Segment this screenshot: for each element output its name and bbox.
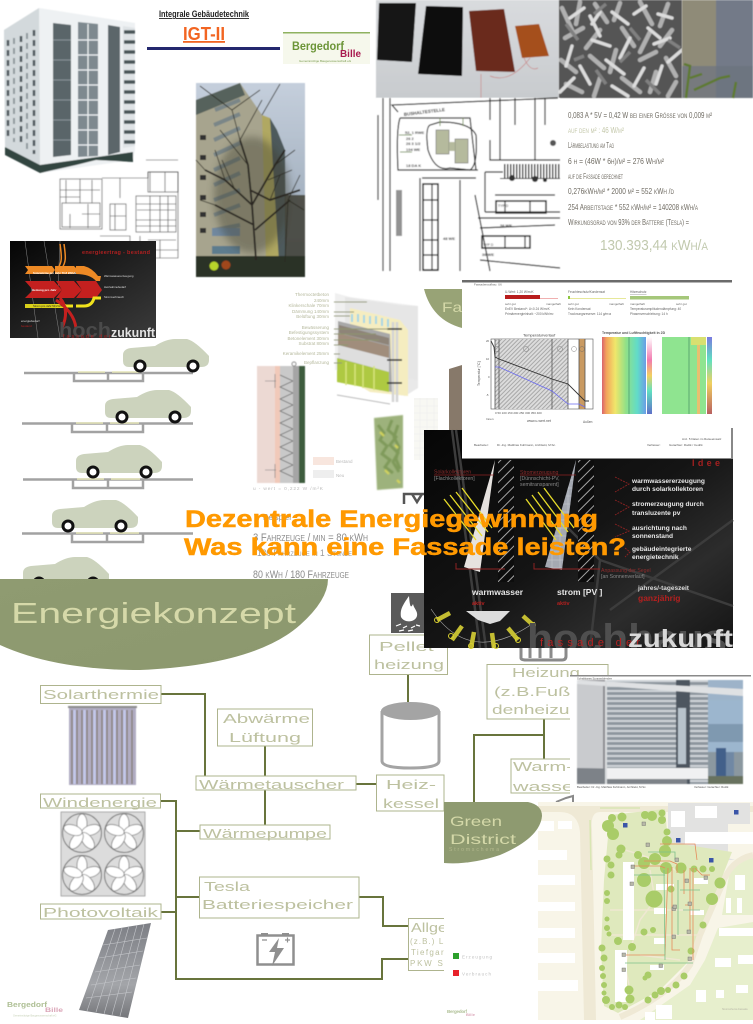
sail: PV	[545, 460, 576, 570]
chart: energieertrag bestand: Heizung pro Jahr	[32, 288, 57, 292]
traffic calculation text: 80 kWh / 180 Fahrzeuge	[253, 569, 349, 581]
idea list: energietechnik	[632, 554, 679, 561]
logo: hochhaus fassade der zukunft: hochhaus	[527, 617, 727, 661]
facade layer labels: Substrat 80mm	[298, 341, 329, 346]
site plan drawing: 48 WE	[443, 236, 455, 241]
panel: u-wert calculation sheet	[462, 280, 733, 459]
label: jahres tageszeit: jahres/-tageszeit	[637, 585, 690, 592]
chart: Temperaturverlauf: Temperatur [°C]	[477, 361, 481, 386]
facade layer labels: Bepflanzung	[304, 360, 329, 365]
rating: Feuchteschutz: Kein Kondensat	[568, 307, 591, 311]
rating: Hitzeschutz: sehr gut	[676, 302, 687, 306]
label: Stromerzeugung	[520, 470, 560, 488]
panel: u-wert calculation sheet: Fassadenaufbau: U6	[474, 282, 502, 286]
roads	[538, 806, 753, 1020]
box: Pelletheizung: Pellet-	[379, 639, 441, 654]
label: jahres tageszeit: ganzjährig	[638, 593, 681, 603]
sail: solar collector	[464, 460, 495, 572]
panel: Green District: District	[450, 831, 516, 847]
box: Abwärme Lüftung: Abwärme	[223, 711, 310, 726]
chart: Temperaturverlauf: 10	[486, 357, 490, 361]
radiator icon	[521, 648, 566, 660]
box: Wärmetauscher	[196, 776, 356, 792]
label: Solarkollektoren: [Flachkollektoren]	[434, 476, 475, 482]
box: Wärmepumpe	[200, 825, 330, 841]
3D facade section	[334, 293, 418, 404]
heading: energieertrag bestand: energieertrag - bestand	[82, 250, 150, 256]
cars on piezo road	[22, 339, 209, 590]
map credit: Stromschema Fassade	[722, 1008, 748, 1011]
site plan drawing	[376, 98, 560, 271]
chart: energieertrag bestand: Solarwärme pro Jahr 70.8 kWh/a	[33, 271, 77, 275]
box: Warmwasser: Warm-	[513, 759, 573, 774]
idea list: transluzente pv	[632, 510, 681, 517]
car 1	[123, 339, 209, 371]
sheet footer: Anz. 5 Daten im Reiseeinsatz	[682, 437, 722, 441]
chart: energieertrag bestand: Heizwärmebedarf	[104, 285, 126, 289]
chart: Temperaturverlauf: Temperaturverlauf	[523, 332, 556, 338]
box: Photovoltaik: Photovoltaik	[43, 905, 159, 920]
sheet footer: Dr.-Ing. Matthias Kuhlmann, Architekt, M.Sc.	[497, 443, 556, 447]
chart: Temperaturverlauf: Innen	[486, 417, 494, 421]
calculation text block: Lärmbelastung am Tag	[568, 141, 614, 150]
site plan drawing: TYP D	[498, 204, 509, 208]
olive panel fragment	[424, 289, 462, 328]
calculation text block: 254 Arbeitstage * 552 kWh/m² = 140208 kWh/a	[568, 203, 698, 212]
rating: U-Wert: EnEV Bestand*: U<0.24 W/m²K	[505, 307, 551, 311]
rule under heading	[147, 47, 280, 50]
panel: Green District	[444, 802, 542, 863]
site plan drawing: TYP D	[483, 243, 494, 247]
facade layer labels: 240mm	[314, 298, 329, 303]
heading panel: Energiekonzept: Energiekonzept	[11, 598, 296, 630]
box: Windenergie	[40, 794, 160, 810]
road section 1	[24, 372, 193, 381]
heading: IGT-II: IGT-II	[183, 24, 225, 44]
site map: green district	[538, 802, 753, 1020]
label: Anpassung der Segel	[601, 568, 651, 580]
idea list: ausrichtung nach	[632, 525, 687, 532]
chart: Temperaturverlauf: Außen	[583, 420, 593, 424]
chart: energieertrag bestand: Strom pro Jahr 59 kWh	[33, 304, 62, 308]
chart: energieertrag bestand: energiebedarf	[21, 319, 40, 323]
meter tags	[622, 822, 708, 972]
floor plan	[60, 160, 178, 258]
calculation text block: 6 h = (46W * 6h)/m² = 276 Wh/m²	[568, 157, 664, 166]
idea list: sonnenstand	[632, 533, 673, 540]
facade layer labels: Dämmung 140mm	[292, 309, 329, 314]
title: Dezentrale Energiegewinnung: Was kann eine Fassade leisten?	[184, 534, 626, 561]
box: Allgemein: (z.B.) Licht	[410, 937, 461, 946]
site plan drawing: 52, 1 RWE	[405, 130, 425, 135]
traffic calculation text: Beispiel	[263, 513, 291, 522]
logo: Bergedorf Bille small: Bille	[45, 1007, 63, 1014]
logo: hochhaus zukunft	[59, 320, 156, 342]
label: Solarkollektoren: Solarkollektoren	[434, 470, 471, 476]
heading: Idee: Idee	[692, 458, 720, 468]
chart: Temperaturverlauf: 20	[486, 339, 490, 343]
facade layer labels: Belüftung 30mm	[296, 314, 329, 319]
chart: temperature and humidity maps	[602, 331, 712, 414]
label: Anpassung der Segel: Anpassung der Segel	[601, 568, 651, 574]
rating: Hitzeschutz: Phasenverschiebung: 14 h	[630, 312, 668, 316]
label: Solarkollektoren	[434, 470, 475, 482]
label: warmwasser aktiv: warmwasser	[471, 587, 524, 597]
box: Allgemein: PKW Stell	[410, 959, 460, 968]
facade layer labels: Bewässerung	[302, 325, 329, 330]
flame icon	[391, 593, 427, 633]
trees	[598, 810, 726, 1010]
result value: 130.393,44 kWh/a	[600, 237, 709, 254]
photo: existing tower	[196, 83, 305, 277]
road section 3	[23, 479, 193, 488]
hatched facade columns	[498, 460, 514, 582]
buildings	[538, 806, 753, 1020]
logo: Bergedorf Bille: Bergedorf	[292, 41, 344, 53]
site plan drawing: 26 2	[406, 136, 415, 141]
box: Tesla Batteriespeicher: Tesla	[204, 879, 251, 894]
car 4	[52, 500, 138, 531]
calculation text block: auf den m² : 46 W/m²	[568, 126, 624, 135]
logo: hochhaus zukunft: fassade der	[63, 334, 111, 340]
chart: Temperaturverlauf: 0	[488, 375, 490, 379]
traffic calculation text	[253, 513, 368, 581]
box: Warmwasser	[511, 759, 601, 794]
label: strom PV aktiv: aktiv	[557, 601, 570, 607]
facade layer labels: Betonelement 30mm	[287, 336, 329, 341]
logo: Bergedorf Bille small	[7, 1000, 63, 1018]
label: jahres tageszeit	[637, 585, 690, 603]
box: Pelletheizung: heizung	[374, 657, 444, 672]
calculation text block: 0,083 A * 5V = 0,42 W bei einer Grösse von 0,009 m²	[568, 111, 712, 120]
box: Heizung: Heizung	[512, 665, 580, 680]
panel: Energiekonzept diagram	[7, 593, 608, 1018]
calculation text block	[568, 111, 712, 254]
facade layer labels: Thermoctetbeton	[295, 292, 329, 297]
box: Solarthermie: Solarthermie	[43, 687, 159, 702]
panel: window shading photo: Schaltbares Sonnenblenden	[577, 676, 613, 680]
photovoltaic panel	[79, 923, 151, 1018]
road section 4	[22, 533, 193, 542]
box: Photovoltaik	[40, 904, 161, 920]
label: Stromerzeugung: [Dünnschicht-PV,	[520, 476, 560, 482]
label: Stromerzeugung: Stromerzeugung	[520, 470, 558, 476]
box: Abwärme Lüftung: Lüftung	[229, 730, 301, 745]
site plan drawing: 18 DA K	[406, 163, 421, 168]
rating: U-Wert: U-Wert: 1,20 W/m²K	[505, 290, 535, 294]
rating: Feuchteschutz: Trocknungsreserve: 114 g/m²a	[568, 312, 611, 316]
box: Allgemein	[408, 918, 478, 970]
traffic calculation text: 180 Fahrzeuge in 1 Stunde	[257, 548, 352, 558]
box: Solarthermie	[40, 686, 161, 704]
rating: Hitzeschutz: Hitzeschutz	[630, 290, 647, 294]
calculation text block: auf die Fassade gerechnet	[568, 172, 623, 181]
box: Pelletheizung	[370, 635, 448, 674]
facade layer labels	[283, 292, 329, 365]
idea list: gebäudeintegrierte	[632, 546, 692, 553]
wall section	[257, 362, 305, 483]
solar rays	[444, 488, 574, 540]
panel: window shading photo	[570, 675, 753, 801]
sheet footer	[474, 437, 722, 447]
box: Heizkessel: kessel	[383, 796, 439, 811]
wall section legend	[253, 457, 353, 492]
parking icons	[623, 810, 738, 862]
label: Anpassung der Segel: [an Sonnenverlauf]	[601, 574, 645, 580]
calculation text block: 0,276kWh/m² * 2000 m² = 552 kWh /d	[568, 187, 675, 196]
logo: Bergedorf Bille small right: Bergedorf	[447, 1009, 468, 1014]
tile panel fragment	[414, 398, 438, 460]
sun path shuttles	[431, 609, 536, 648]
box: Tesla Batteriespeicher: Batteriespeicher	[202, 897, 354, 912]
green wall sample	[374, 415, 403, 490]
photo: stone tiles with plant	[682, 0, 753, 98]
box: Heizung	[487, 664, 608, 719]
panel: Green District: Green	[450, 813, 502, 829]
box: Warmwasser: wasser	[511, 779, 582, 794]
chart: energieertrag bestand: Warmwassererzeugung	[104, 274, 134, 278]
label: warmwasser aktiv	[471, 587, 524, 607]
box: Heizkessel	[376, 775, 444, 811]
chart: energieertrag bestand: Stromverbrauch	[104, 295, 124, 299]
box: Windenergie: Windenergie	[43, 795, 157, 810]
box: Abwärme Lüftung	[218, 709, 312, 746]
label: Stromerzeugung: semitransparent]	[520, 482, 559, 488]
site plan drawing: 104 WE	[406, 147, 421, 152]
rating: U-Wert	[505, 290, 561, 316]
title: Dezentrale Energiegewinnung: Dezentrale Energiegewinnung	[185, 506, 598, 533]
box: Allgemein: Tiefgarage	[411, 948, 462, 957]
icon: battery	[258, 933, 294, 966]
logo: Bergedorf Bille small: Gemeinnützige Baugenossenschaft eG	[13, 1014, 57, 1018]
site plan drawing: BUSHALTESTELLE	[404, 107, 445, 117]
car 2	[105, 390, 191, 422]
rating: U-Wert: mangelhaft	[546, 302, 561, 306]
heading panel: Energiekonzept	[0, 579, 328, 670]
energy network lines	[625, 844, 710, 963]
solar thermal collector	[68, 706, 137, 785]
site plan drawing: 36 WE	[500, 223, 512, 228]
photo: phones and solar foils	[376, 0, 559, 98]
logo: Bergedorf Bille small right: Bille	[466, 1012, 476, 1017]
facade layer labels: Keramikelement 25mm	[283, 351, 329, 356]
idea list: durch solarkollektoren	[632, 486, 703, 493]
panel: window shading photo: Bearbeiter: Dr.-Ing. Matthias Kuhlmann, Architekt, M.Sc.	[577, 785, 647, 789]
panel: hochhaus facade idea	[424, 430, 734, 661]
chart: energieertrag bestand: bestand	[21, 324, 32, 328]
rating: Feuchteschutz: Feuchteschutz/Kondensat	[568, 290, 605, 294]
logo: Bergedorf Bille	[283, 32, 370, 64]
road section 2	[22, 423, 193, 432]
chart: temperature and humidity maps: Temperatur und Luftfeuchtigkeit in 2D	[602, 331, 666, 335]
roof fragment	[556, 796, 573, 802]
chart: Temperaturverlauf: 0 50 100 150 200 250 300 350 400	[495, 411, 542, 415]
idea list	[615, 477, 705, 561]
box: Allgemein: Allge	[411, 920, 447, 935]
box: Heizung: denheizung)	[492, 702, 597, 717]
car 3	[76, 445, 162, 477]
traffic calculation text: 3 Fahrzeuge / min = 80 kWh	[253, 532, 368, 544]
paths	[610, 850, 700, 1000]
adjustment line	[456, 563, 600, 569]
car 5	[23, 557, 109, 590]
panel: window shading photo: Verfasser: Gutachter: Rodik	[694, 785, 729, 789]
calculation text block: Wirkungsgrad von 93% der Batterie (Tesla) =	[568, 218, 689, 227]
rating: Feuchteschutz: sehr gut	[568, 302, 579, 306]
logo: Bergedorf Bille small: Bergedorf	[7, 1000, 48, 1009]
legend: Erzeugung and Verbrauch	[453, 953, 492, 976]
logo: hochhaus fassade der zukunft: zukunft	[628, 625, 734, 653]
wall section legend: u - wert = 0,222 W /m²K	[253, 486, 324, 492]
legend: Erzeugung and Verbrauch: Verbrauch	[462, 972, 491, 976]
parking area	[668, 803, 750, 860]
box: Heizkessel: Heiz-	[386, 777, 436, 792]
logo: hochhaus fassade der zukunft	[530, 623, 733, 648]
surrounding green	[722, 855, 753, 915]
wind turbines	[61, 812, 145, 896]
connectors	[160, 675, 544, 979]
chart: energieertrag bestand	[10, 241, 156, 342]
facade layer labels: Befestigungssystem	[289, 330, 329, 335]
sheet footer: Bearbeiter:	[474, 443, 489, 447]
label: warmwasser aktiv: aktiv	[472, 601, 485, 607]
rating: U-Wert: sehr gut	[505, 302, 516, 306]
chart: Temperaturverlauf: www.u-wert.net	[527, 419, 551, 423]
rating: Feuchteschutz	[568, 290, 626, 316]
rating: Feuchteschutz: mangelhaft	[609, 302, 624, 306]
logo: Bergedorf Bille small right	[447, 1009, 476, 1017]
legend: Erzeugung and Verbrauch: Erzeugung	[462, 954, 492, 960]
logo: hochhaus fassade der zukunft: fassade der	[540, 637, 640, 649]
box: Wärmetauscher: Wärmetauscher	[199, 777, 345, 792]
sheet footer: Verfasser:	[647, 443, 661, 447]
building render	[4, 8, 135, 173]
wall section legend: Neu	[336, 473, 345, 478]
panel: Green District: Stromschema	[449, 847, 499, 853]
idea list: stromerzeugung durch	[632, 501, 704, 508]
rating: U-Wert: Primärenergieinhalt: ~200 kWh/m²	[505, 312, 553, 316]
tank icon	[381, 702, 440, 768]
chart: Temperaturverlauf	[477, 332, 593, 424]
brown wall fragment	[449, 365, 462, 432]
olive panel fragment: Fa	[442, 299, 462, 315]
site plan drawing: 36 WE	[482, 252, 494, 257]
wall section legend: Bestand	[336, 459, 353, 464]
box: Wärmepumpe: Wärmepumpe	[203, 826, 327, 841]
logo: hochhaus zukunft: hoch	[59, 320, 111, 342]
logo: Bergedorf Bille: Gemeinnützige Baugenossenschaft eG	[299, 59, 352, 63]
plot	[601, 809, 732, 1013]
logo: Bergedorf Bille: Bille	[340, 49, 361, 60]
sheet footer: Gutachter: Rodik / Cedrik	[669, 443, 703, 447]
site plan drawing: 26 3 1/2	[406, 141, 421, 146]
rating: Hitzeschutz: Temperaturamplitudendämpfung: 40	[630, 307, 681, 311]
facade layer labels: Klinkerschale 70mm	[288, 303, 329, 308]
box: Tesla Batteriespeicher	[200, 877, 359, 918]
label: strom PV aktiv: strom [PV ]	[557, 587, 603, 597]
title: Integrale Gebäudetechnik: Integrale Gebäudetechnik	[159, 9, 250, 19]
idea list: warmwassererzeugung	[631, 478, 705, 485]
box: Heizung: (z.B.Fußbo-	[494, 684, 599, 699]
logo: hochhaus zukunft: zukunft	[111, 325, 156, 340]
rating: Hitzeschutz: mangelhaft	[630, 302, 645, 306]
dark logo fragment	[404, 494, 424, 504]
photo: nano structures	[559, 0, 682, 98]
rating: Hitzeschutz	[630, 290, 689, 316]
chart: Temperaturverlauf: -5	[486, 393, 489, 397]
white panel behind green district	[444, 802, 540, 1024]
title: Dezentrale Energiegewinnung	[184, 506, 626, 561]
label: strom PV aktiv	[557, 587, 603, 607]
